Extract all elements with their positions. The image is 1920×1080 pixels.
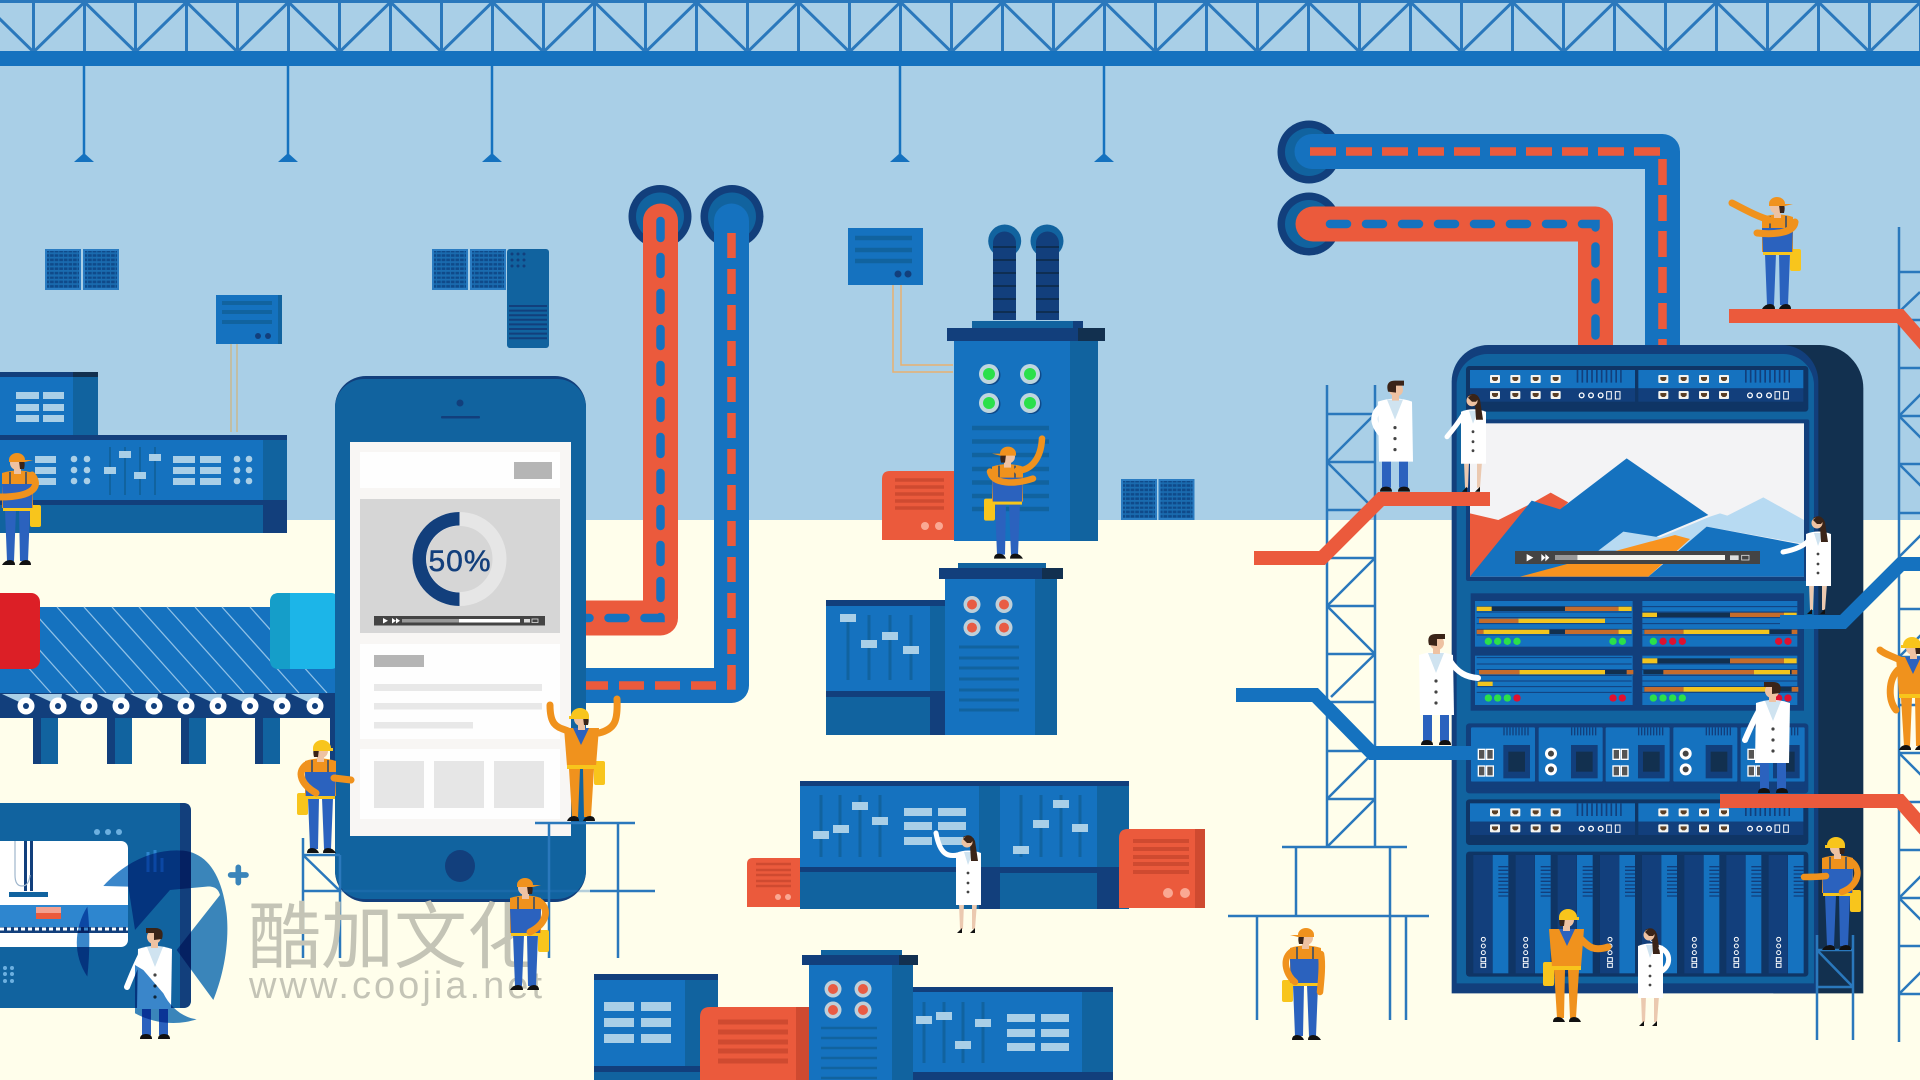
blue platform left of rack [1236, 695, 1476, 753]
left scaffold tower by rack [1228, 385, 1429, 1020]
io module row [1466, 723, 1808, 793]
worker on ladder [1804, 837, 1861, 950]
twin chimneys [988, 224, 1064, 320]
woman on red platform [1447, 394, 1486, 492]
hanging ceiling lamps [74, 66, 1114, 162]
mid console with sliders [826, 600, 945, 735]
lower tower unit [939, 563, 1063, 735]
background: sky wall [0, 0, 1920, 520]
phone screen [350, 442, 571, 836]
progress donut 50% [412, 512, 500, 606]
upper tower unit [947, 321, 1105, 541]
left bottom machine [0, 803, 191, 1008]
watermark logo [77, 850, 246, 1023]
central console right panel [1000, 781, 1129, 909]
lower network switch [1466, 799, 1808, 845]
worker on tower [984, 439, 1042, 559]
video player bar [374, 616, 545, 626]
bottom red unit [700, 1007, 809, 1080]
smartphone [335, 376, 586, 902]
bottom tower [802, 950, 918, 1080]
top network switch [1466, 366, 1808, 412]
wall control box near tower [848, 228, 953, 372]
small red unit [747, 858, 800, 907]
control box on left wall [216, 295, 282, 432]
red platform left of rack [1254, 499, 1490, 558]
left console machine [0, 372, 287, 533]
worker under scaffold [1282, 928, 1322, 1040]
watermark url: www.coojia.net [248, 965, 542, 1007]
worker waving on phone scaffold [550, 699, 617, 821]
background: factory floor [0, 520, 1920, 1080]
server rack [1452, 345, 1863, 993]
screen header [360, 452, 560, 488]
phone camera and speaker [441, 400, 480, 418]
scaffold around phone [303, 823, 655, 958]
doctor on red platform [1375, 381, 1413, 492]
status lights [1485, 638, 1792, 702]
doctor at bottom-left machine [127, 928, 172, 1039]
monitor screen with landscape [1466, 419, 1809, 581]
video panel [360, 499, 560, 633]
conveyor belt [0, 593, 340, 718]
doctor on blue platform [1419, 634, 1478, 745]
roof truss [0, 0, 1920, 66]
thumbnails panel [360, 749, 560, 819]
woman at rack base [1638, 928, 1669, 1026]
rack front frame [1452, 345, 1818, 993]
worker left of phone [297, 740, 351, 853]
red platform lower right [1720, 801, 1920, 841]
wall vents near tower [1121, 479, 1194, 520]
blue pipe to server rack [1278, 120, 1662, 360]
bottom right console [902, 987, 1113, 1080]
ladder under right worker [1817, 935, 1853, 1040]
drive bays [1466, 852, 1808, 977]
red pipe to phone [560, 185, 692, 618]
percent label: 50% [428, 545, 492, 578]
woman at central console [936, 833, 981, 933]
worker below phone [510, 878, 549, 990]
large red unit [1119, 829, 1205, 908]
status bars [1477, 607, 1798, 692]
rack inner body [1457, 354, 1814, 983]
worker at left edge [0, 453, 41, 565]
text panel [360, 644, 560, 739]
monitor player bar [1515, 551, 1760, 564]
worker in orange at rack base [1543, 909, 1608, 1022]
home button [445, 850, 475, 882]
red unit beside tower [882, 471, 954, 540]
wall vents middle with tall cabinet [432, 249, 549, 348]
woman at monitor [1783, 516, 1831, 614]
conveyor legs [33, 718, 340, 764]
wall vents left [45, 249, 119, 290]
orange worker at right edge [1880, 637, 1920, 750]
doctor in front of rack [1745, 682, 1790, 793]
red pipe to server rack [1278, 192, 1596, 360]
blue platform right of rack [1780, 564, 1920, 622]
rack rear shadow [1773, 345, 1863, 993]
bottom-left cabinet [594, 974, 718, 1080]
right scaffold tower [1899, 227, 1920, 1042]
central console left panel [800, 781, 1000, 909]
red platform upper right [1729, 316, 1920, 356]
worker upper right [1732, 197, 1801, 309]
blue pipe to phone [560, 185, 764, 686]
status panels [1471, 593, 1804, 711]
watermark text: 酷加文化 [248, 897, 540, 978]
